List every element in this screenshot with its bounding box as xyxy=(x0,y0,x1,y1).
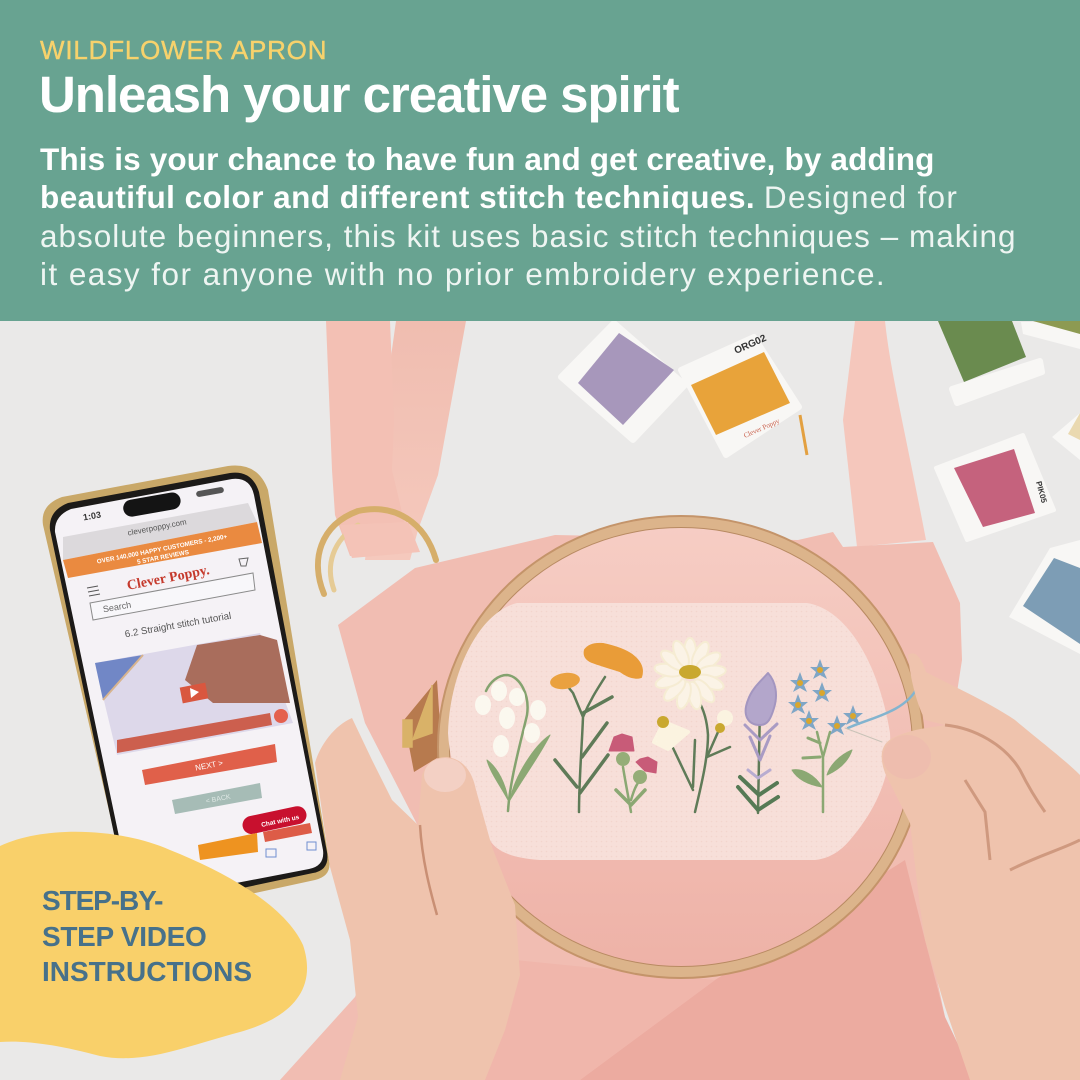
thumb crease xyxy=(420,825,437,915)
chat button: Chat with us xyxy=(261,814,300,829)
lesson title: 6.2 Straight stitch tutorial xyxy=(124,611,232,640)
browser bar xyxy=(63,503,257,560)
hoop clasp xyxy=(404,680,442,772)
status icons xyxy=(196,487,224,497)
next button: NEXT > xyxy=(194,758,224,773)
cart icon xyxy=(239,558,248,566)
thumbnail xyxy=(883,735,931,779)
back button: < BACK xyxy=(205,794,232,805)
chat button xyxy=(241,805,308,836)
stabilizer patch xyxy=(448,603,890,860)
thread card: purple xyxy=(561,323,685,440)
badge text: STEP VIDEO xyxy=(42,920,207,952)
header panel xyxy=(0,0,1080,321)
phone black bezel xyxy=(50,473,327,897)
daisy bud xyxy=(717,710,733,726)
thumbnail xyxy=(424,758,466,792)
apron lower panel xyxy=(580,860,975,1080)
eyebrow label: WILDFLOWER APRON xyxy=(40,35,327,65)
body copy: beautiful color and different stitch techniques. Designed for xyxy=(40,179,958,215)
badge text xyxy=(42,885,252,987)
phone screen xyxy=(55,479,323,890)
apron lower-left panel xyxy=(360,870,715,1080)
finger shadow lines xyxy=(945,725,1080,870)
banner text: 5 STAR REVIEWS xyxy=(137,549,190,566)
thread card: cream xyxy=(1052,413,1080,460)
phone xyxy=(43,466,329,905)
thread and needle xyxy=(845,688,917,742)
large daisy petals xyxy=(654,638,726,710)
badge text: STEP-BY- xyxy=(42,885,162,916)
search placeholder: Search xyxy=(102,600,132,614)
thread card: orange: ORG02 xyxy=(733,333,769,357)
orange banner xyxy=(63,522,262,578)
flower: daisies xyxy=(654,638,733,812)
body copy: it easy for anyone with no prior embroidery experience. xyxy=(40,256,886,292)
embroidered flowers xyxy=(475,638,917,813)
strap loop over ring xyxy=(340,522,420,558)
url: cleverpoppy.com xyxy=(127,517,188,538)
menu icon xyxy=(87,586,100,596)
gold hoop screw xyxy=(403,685,432,747)
video player xyxy=(95,633,293,755)
back button xyxy=(172,783,262,814)
thread card: olive xyxy=(1021,321,1080,349)
body copy xyxy=(40,141,1017,292)
logo: Clever Poppy. xyxy=(126,563,211,594)
body copy: absolute beginners, this kit uses basic stitch techniques – making xyxy=(40,218,1017,254)
embroidery hoop xyxy=(437,515,925,979)
thread card: orange xyxy=(681,333,807,455)
d-ring buckle xyxy=(318,509,436,594)
body copy: This is your chance to have fun and get creative, by adding xyxy=(40,141,935,177)
browser icons xyxy=(266,842,316,857)
flower: orange yarrow xyxy=(549,644,642,812)
next button xyxy=(142,744,277,785)
apron body xyxy=(280,532,975,1080)
banner text: OVER 140,000 HAPPY CUSTOMERS - 2,200+ xyxy=(96,533,228,566)
flower: lavender xyxy=(738,673,778,813)
left hand xyxy=(315,718,520,1080)
orange need button xyxy=(198,833,258,860)
right apron strap xyxy=(843,321,926,547)
flower: thistles xyxy=(609,734,657,812)
clock: 1:03 xyxy=(82,510,102,522)
phone gold case xyxy=(43,466,329,905)
red block xyxy=(263,823,312,842)
right hand xyxy=(882,653,1080,1080)
thread card: green xyxy=(938,321,1042,403)
yellow badge blob xyxy=(0,832,307,1058)
small daisy xyxy=(654,722,688,749)
thread card: pink: PIK05 xyxy=(1034,480,1049,505)
thread card: pink xyxy=(936,435,1054,540)
thread card: orange: Clever Poppy xyxy=(743,417,781,440)
dynamic island xyxy=(122,491,182,518)
badge text: INSTRUCTIONS xyxy=(42,956,252,987)
thread card: blue xyxy=(1009,540,1080,654)
title: Unleash your creative spirit xyxy=(39,66,679,123)
left apron strap xyxy=(326,321,466,560)
flower: forget-me-nots xyxy=(788,659,863,812)
flower: lily of the valley xyxy=(475,675,550,811)
search box xyxy=(90,573,255,620)
